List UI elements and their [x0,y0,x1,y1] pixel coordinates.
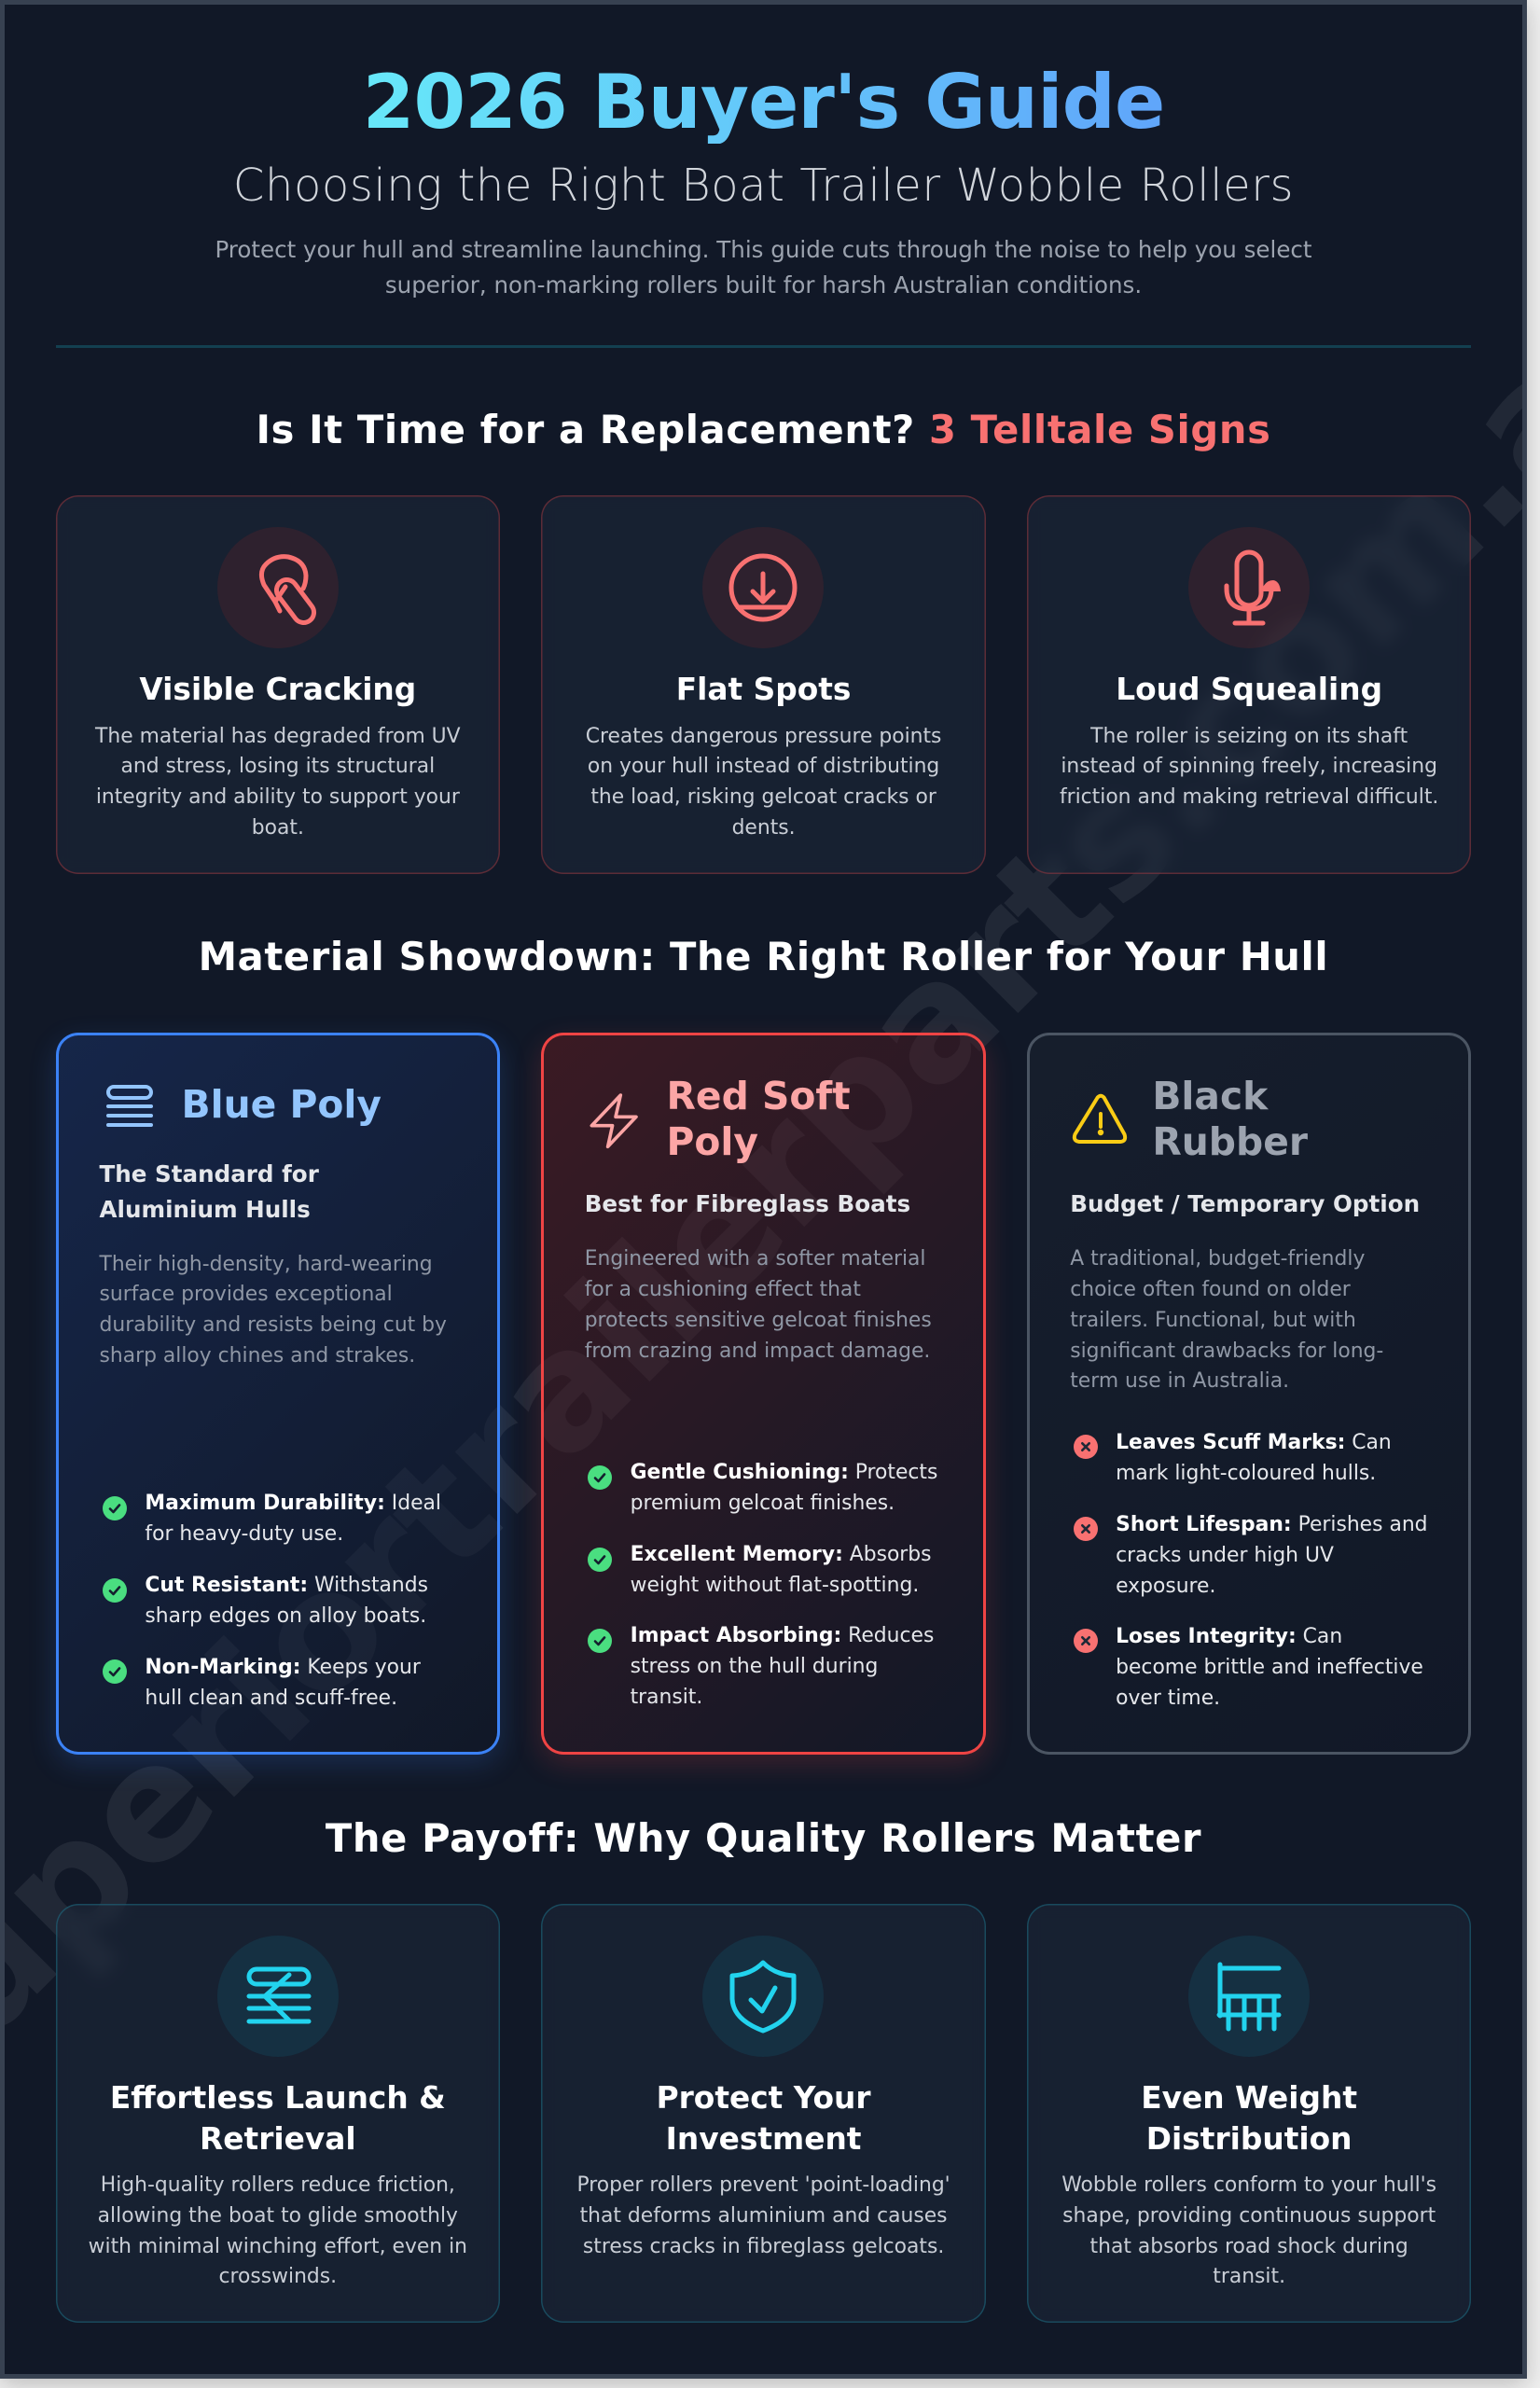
icon: microphone [1188,527,1310,648]
subtitle: Choosing the Right Boat Trailer Wobble Rollers [233,160,1294,212]
icon: warning triangle [1073,1093,1127,1144]
benefit: durability: Maximum Durability: Ideal [145,1492,441,1515]
icon: flat spot circle [702,527,824,648]
material description: Their high-density, hard-wearing [99,1253,433,1276]
intro text: superior, non-marking rollers built for harsh Australian conditions. [385,271,1142,298]
material description [99,1253,447,1368]
material description: sharp alloy chines and strakes. [99,1344,415,1368]
icon: weight distribution [1188,1936,1310,2057]
card text: friction and making retrieval difficult. [1060,785,1438,809]
card text: that deforms aluminium and causes [580,2204,948,2228]
benefit: cut resistant: sharp edges on alloy boats. [145,1604,426,1628]
intro text: Protect your hull and streamline launching. This guide cuts through the noise to help you select [215,235,1312,263]
card text: with minimal winching effort, even in [89,2235,467,2258]
card text: boat. [252,816,304,840]
material use: Budget / Temporary Option [1070,1190,1420,1216]
benefit: impact: Impact Absorbing: Reduces [631,1624,934,1647]
card text: The roller is seizing on its shaft [1090,724,1408,748]
card title: Protect Your [657,2080,871,2116]
card text: High-quality rollers reduce friction, [101,2173,455,2197]
card text: instead of spinning freely, increasing [1061,755,1437,778]
benefit: memory [588,1543,932,1597]
intro text [215,235,1312,298]
material description: Engineered with a softer material [585,1247,926,1270]
card title: Flat Spots [676,672,851,707]
card title: Effortless Launch & [110,2080,446,2116]
drawback: scuff marks: mark light-coloured hulls. [1116,1461,1376,1485]
panel: even weight [1027,1904,1471,2323]
material use: Best for Fibreglass Boats [585,1190,910,1216]
benefit: durability: for heavy-duty use. [145,1522,343,1546]
benefit: cushioning [588,1461,937,1515]
material name [1152,1074,1308,1164]
material name: Rubber [1152,1119,1308,1164]
material description: for a cushioning effect that [585,1278,861,1301]
card text [586,724,941,840]
card title [657,2080,871,2157]
card text: transit. [1213,2265,1285,2288]
benefit: non-marking [103,1655,421,1709]
card text: allowing the boat to glide smoothly [98,2204,458,2228]
card text: Creates dangerous pressure points [586,724,941,748]
benefit: impact: transit. [631,1686,702,1709]
card text: dents. [732,816,796,840]
panel: protect investment [541,1904,986,2323]
icon: shield check [702,1936,824,2057]
material use: The Standard for [99,1160,319,1187]
icon: cracked roller [217,527,339,648]
card text [1060,724,1438,809]
card title: Even Weight [1141,2080,1357,2116]
drawback: integrity: over time. [1116,1687,1220,1709]
material description: from crazing and impact damage. [585,1340,930,1363]
drawback: scuff marks: Leaves Scuff Marks: Can [1116,1431,1392,1453]
card title [1141,2080,1357,2157]
material use [99,1160,319,1222]
benefit: memory: weight without flat-spotting. [631,1574,919,1597]
card text [576,2173,950,2258]
drawback: short lifespan: cracks under high UV [1116,1543,1334,1567]
panel: black rubber [1027,1033,1471,1755]
benefit: impact [588,1624,934,1709]
material description: significant drawbacks for long- [1070,1340,1383,1363]
benefit: cushioning: Gentle Cushioning: Protects [631,1461,937,1484]
card text: and stress, losing its structural [120,755,435,778]
panel: effortless launch [56,1904,500,2323]
material description [585,1247,932,1363]
heading: the payoff: The Payoff: Why Quality Rollers Matter [326,1815,1201,1860]
benefit: non-marking: Non-Marking: Keeps your [145,1655,421,1679]
icon: lightning bolt [590,1093,638,1149]
card text: Wobble rollers conform to your hull's [1061,2173,1436,2197]
material name [666,1074,851,1164]
material name: Black [1152,1074,1268,1118]
panel: visible cracking [56,495,500,874]
material use: Aluminium Hulls [99,1196,311,1222]
benefit: memory: Excellent Memory: Absorbs [631,1543,932,1566]
card text: Proper rollers prevent 'point-loading' [576,2173,950,2197]
card text: The material has degraded from UV [95,724,461,748]
benefit: cushioning: premium gelcoat finishes. [631,1492,895,1515]
panel: flat spots [541,495,986,874]
card title: Investment [666,2121,862,2157]
drawback: short lifespan: Short Lifespan: Perishes and [1116,1513,1428,1535]
panel: loud squealing [1027,495,1471,874]
material description: protects sensitive gelcoat finishes [585,1309,932,1332]
card text: shape, providing continuous support [1062,2204,1436,2228]
card text [89,2173,467,2288]
drawback: short lifespan [1074,1513,1428,1597]
card title: Loud Squealing [1116,672,1382,707]
benefit: cut resistant: Cut Resistant: Withstands [145,1574,428,1597]
material description [1070,1247,1383,1393]
benefit: cut resistant [103,1574,428,1628]
card title: Retrieval [200,2121,356,2157]
card text [95,724,461,840]
material description: choice often found on older [1070,1278,1351,1301]
drawback: short lifespan: exposure. [1116,1575,1215,1597]
card text: that absorbs road shock during [1090,2235,1408,2258]
card title: Visible Cracking [139,672,416,707]
card title [110,2080,446,2157]
benefit: non-marking: hull clean and scuff-free. [145,1687,397,1709]
card text: stress cracks in fibreglass gelcoats. [583,2235,944,2258]
drawback: integrity: Loses Integrity: Can [1116,1625,1342,1647]
material description: trailers. Functional, but with [1070,1309,1356,1332]
drawback: integrity: become brittle and ineffective [1116,1655,1423,1679]
icon: roller stack [106,1085,153,1127]
heading: material showdown: Material Showdown: The Right Roller for Your Hull [199,934,1328,979]
icon: gliding rollers [217,1936,339,2057]
card text [1061,2173,1436,2288]
drawback: integrity [1074,1625,1423,1709]
card text: the load, risking gelcoat cracks or [590,785,936,809]
card text: integrity and ability to support your [96,785,460,809]
benefit: impact: stress on the hull during [631,1655,878,1678]
material description: durability and resists being cut by [99,1313,447,1337]
material name: Red Soft [666,1074,851,1118]
panel: red soft poly [541,1033,986,1755]
panel: blue poly [56,1033,500,1755]
material description: term use in Australia. [1070,1369,1289,1393]
card text: on your hull instead of distributing [588,755,939,778]
material description: A traditional, budget-friendly [1070,1247,1365,1270]
card text: crosswinds. [219,2265,337,2288]
material description: surface provides exceptional [99,1283,393,1306]
card title: Distribution [1146,2121,1353,2157]
title: 2026 Buyer's Guide [363,59,1164,146]
benefit: durability [103,1492,441,1546]
material name: Blue Poly [181,1082,382,1127]
material name: Poly [666,1119,758,1164]
heading: telltale signs: Is It Time for a Replacement? 3 Telltale Signs [256,407,1270,452]
drawback: scuff marks [1074,1431,1392,1485]
